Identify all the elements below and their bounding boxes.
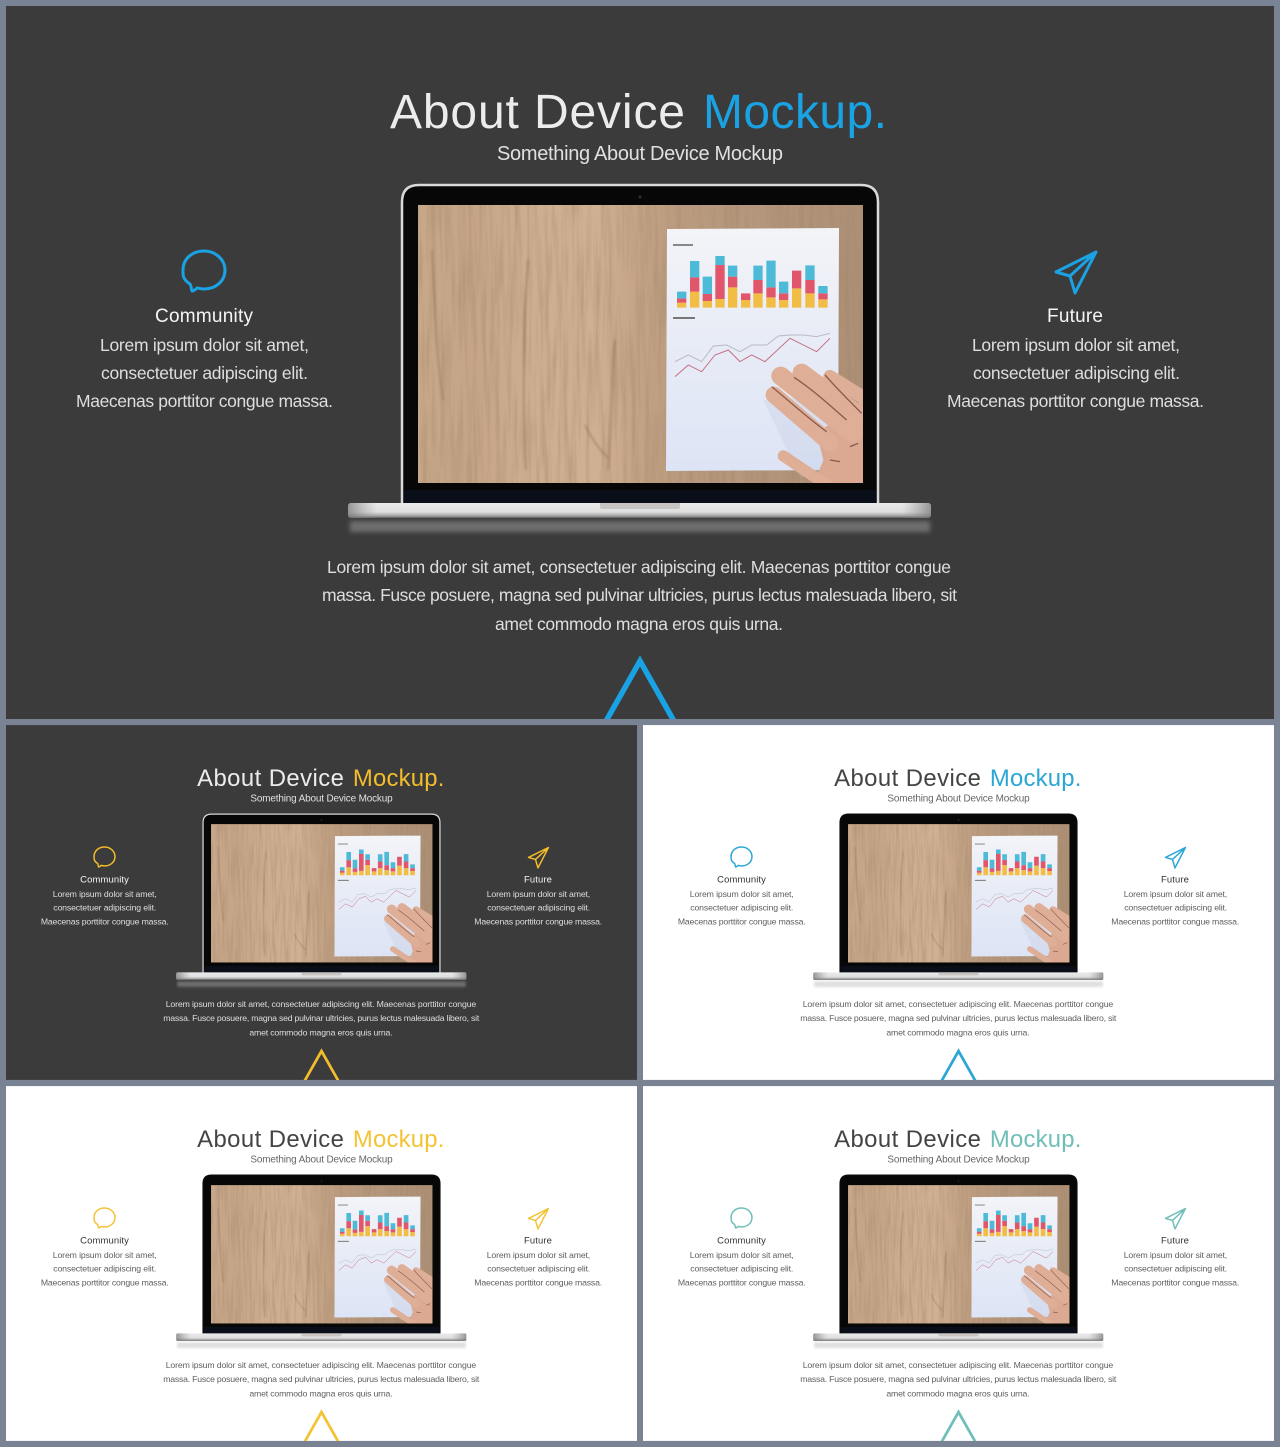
icon: speech bubble xyxy=(94,847,115,867)
laptop body xyxy=(840,814,1077,974)
wood desk photo xyxy=(848,1185,1069,1323)
text block: future: Lorem ipsum dolor sit amet, xyxy=(487,889,590,899)
icon: paper plane xyxy=(1166,848,1185,868)
triangle marker xyxy=(300,1412,343,1447)
description paragraph: amet commodo magna eros quis urna. xyxy=(886,1028,1030,1038)
bar chart xyxy=(340,1211,415,1236)
description paragraph: amet commodo magna eros quis urna. xyxy=(495,614,783,634)
text block: future xyxy=(474,874,602,927)
text block: community: Community xyxy=(155,306,254,327)
text block: future: Maecenas porttitor congue massa. xyxy=(1111,1278,1239,1288)
text block: community: Lorem ipsum dolor sit amet, xyxy=(53,1250,157,1260)
text block: future: Maecenas porttitor congue massa. xyxy=(474,917,602,927)
title xyxy=(834,1126,1081,1153)
wood desk photo xyxy=(848,824,1069,962)
text block: future: Maecenas porttitor congue massa. xyxy=(474,1278,602,1288)
report paper xyxy=(334,1197,421,1317)
hand xyxy=(383,1269,436,1324)
laptop mockup xyxy=(176,1175,466,1348)
text block: future: Future xyxy=(1047,306,1103,327)
icon: paper plane xyxy=(1166,1209,1185,1229)
text block: future: consectetuer adipiscing elit. xyxy=(487,1264,590,1274)
text block: community: consectetuer adipiscing elit. xyxy=(101,363,308,383)
subtitle: Something About Device Mockup xyxy=(250,794,393,805)
description paragraph xyxy=(800,1360,1117,1399)
text block: future: Future xyxy=(524,1235,552,1246)
line chart xyxy=(339,1249,416,1271)
laptop base xyxy=(176,972,466,980)
subtitle: Something About Device Mockup xyxy=(497,143,783,165)
description paragraph: Lorem ipsum dolor sit amet, consectetuer adipiscing elit. Maecenas porttitor congue xyxy=(166,999,476,1009)
line chart xyxy=(339,888,416,910)
laptop mockup xyxy=(348,185,931,532)
laptop mockup xyxy=(813,1175,1103,1348)
description paragraph: massa. Fusce posuere, magna sed pulvinar ultricies, purus lectus malesuada libero, sit xyxy=(800,1013,1117,1023)
hand xyxy=(1020,1269,1073,1324)
bar chart xyxy=(677,256,828,308)
description paragraph xyxy=(163,1360,480,1399)
title: Mockup. xyxy=(990,1126,1081,1153)
text block: community: Maecenas porttitor congue massa. xyxy=(678,917,806,927)
laptop base xyxy=(813,972,1103,980)
text block: future: Maecenas porttitor congue massa. xyxy=(1111,917,1239,927)
description paragraph: Lorem ipsum dolor sit amet, consectetuer adipiscing elit. Maecenas porttitor congue xyxy=(327,557,951,577)
icon: paper plane xyxy=(529,848,548,868)
laptop reflection xyxy=(350,521,930,532)
report paper xyxy=(971,1197,1058,1317)
laptop reflection xyxy=(177,981,466,987)
text block: community: Lorem ipsum dolor sit amet, xyxy=(100,335,309,355)
panel: small white slide, teal accent xyxy=(643,1086,1274,1441)
laptop reflection xyxy=(814,1342,1103,1348)
description paragraph: amet commodo magna eros quis urna. xyxy=(249,1389,393,1399)
panel: large dark slide, blue accent xyxy=(6,6,1274,719)
title xyxy=(390,86,887,139)
text block: community: Maecenas porttitor congue massa. xyxy=(76,391,333,411)
text block: community: consectetuer adipiscing elit. xyxy=(690,903,793,913)
text block: community: consectetuer adipiscing elit. xyxy=(690,1264,793,1274)
description paragraph: Lorem ipsum dolor sit amet, consectetuer adipiscing elit. Maecenas porttitor congue xyxy=(803,1360,1113,1370)
report paper xyxy=(971,836,1058,956)
title xyxy=(834,765,1081,792)
icon: speech bubble xyxy=(183,251,225,291)
laptop base xyxy=(348,503,931,518)
line chart xyxy=(976,888,1053,910)
description paragraph: massa. Fusce posuere, magna sed pulvinar ultricies, purus lectus malesuada libero, sit xyxy=(322,585,957,605)
description paragraph xyxy=(322,557,957,634)
text block: community: Maecenas porttitor congue massa. xyxy=(41,917,169,927)
title: About Device xyxy=(834,1126,981,1153)
text block: community: consectetuer adipiscing elit. xyxy=(53,903,156,913)
text block: future: Lorem ipsum dolor sit amet, xyxy=(487,1250,590,1260)
text block: community: Community xyxy=(717,874,766,885)
hand xyxy=(383,908,436,963)
laptop body xyxy=(203,1175,440,1335)
text block: future: Lorem ipsum dolor sit amet, xyxy=(972,335,1180,355)
text block: future: consectetuer adipiscing elit. xyxy=(1124,1264,1227,1274)
icon: paper plane xyxy=(1056,252,1096,293)
description paragraph: Lorem ipsum dolor sit amet, consectetuer adipiscing elit. Maecenas porttitor congue xyxy=(803,999,1113,1009)
text block: future xyxy=(947,306,1204,411)
panel: small white slide, yellow accent xyxy=(6,1086,637,1441)
icon: speech bubble xyxy=(731,847,752,867)
laptop body xyxy=(203,814,440,974)
text block: community: Maecenas porttitor congue massa. xyxy=(41,1278,169,1288)
title xyxy=(197,1126,444,1153)
title: Mockup. xyxy=(353,765,444,792)
text block: future: consectetuer adipiscing elit. xyxy=(973,363,1180,383)
icon: speech bubble xyxy=(94,1208,115,1228)
triangle marker xyxy=(937,1051,980,1089)
text block: future: consectetuer adipiscing elit. xyxy=(1124,903,1227,913)
laptop body xyxy=(402,185,878,506)
laptop base xyxy=(813,1333,1103,1341)
report paper xyxy=(666,228,839,471)
text block: community xyxy=(41,874,169,927)
line chart xyxy=(675,333,830,377)
subtitle: Something About Device Mockup xyxy=(887,1155,1030,1166)
report paper xyxy=(334,836,421,956)
text block: community xyxy=(41,1235,169,1288)
title: About Device xyxy=(834,765,981,792)
panel: small white slide, blue accent xyxy=(643,725,1274,1080)
laptop reflection xyxy=(177,1342,466,1348)
wood desk photo xyxy=(211,1185,432,1323)
title xyxy=(197,765,444,792)
text block: community: Lorem ipsum dolor sit amet, xyxy=(53,889,157,899)
description paragraph: amet commodo magna eros quis urna. xyxy=(249,1028,393,1038)
icon: paper plane xyxy=(529,1209,548,1229)
description paragraph: massa. Fusce posuere, magna sed pulvinar ultricies, purus lectus malesuada libero, sit xyxy=(163,1374,480,1384)
description paragraph xyxy=(163,999,480,1038)
text block: future: Future xyxy=(1161,874,1189,885)
text block: future xyxy=(1111,874,1239,927)
laptop reflection xyxy=(814,981,1103,987)
bar chart xyxy=(340,850,415,875)
panel: small dark slide, yellow accent xyxy=(6,725,637,1080)
line chart xyxy=(976,1249,1053,1271)
text block: community: Lorem ipsum dolor sit amet, xyxy=(690,889,794,899)
triangle marker xyxy=(597,661,683,737)
laptop mockup xyxy=(176,814,466,987)
wood desk photo xyxy=(418,205,863,483)
text block: community: Community xyxy=(80,874,129,885)
laptop base xyxy=(176,1333,466,1341)
laptop mockup xyxy=(813,814,1103,987)
wood desk photo xyxy=(211,824,432,962)
text block: future xyxy=(474,1235,602,1288)
title: Mockup. xyxy=(990,765,1081,792)
description paragraph: massa. Fusce posuere, magna sed pulvinar ultricies, purus lectus malesuada libero, sit xyxy=(163,1013,480,1023)
text block: future: consectetuer adipiscing elit. xyxy=(487,903,590,913)
laptop body xyxy=(840,1175,1077,1335)
triangle marker xyxy=(300,1051,343,1089)
text block: future: Lorem ipsum dolor sit amet, xyxy=(1124,1250,1227,1260)
title: Mockup. xyxy=(353,1126,444,1153)
description paragraph xyxy=(800,999,1117,1038)
title: About Device xyxy=(197,765,344,792)
text block: future xyxy=(1111,1235,1239,1288)
text block: community: consectetuer adipiscing elit. xyxy=(53,1264,156,1274)
hand xyxy=(1020,908,1073,963)
text block: community xyxy=(678,1235,806,1288)
text block: future: Future xyxy=(1161,1235,1189,1246)
subtitle: Something About Device Mockup xyxy=(250,1155,393,1166)
description paragraph: amet commodo magna eros quis urna. xyxy=(886,1389,1030,1399)
text block: community: Community xyxy=(717,1235,766,1246)
text block: future: Future xyxy=(524,874,552,885)
icon: speech bubble xyxy=(731,1208,752,1228)
text block: community xyxy=(76,306,333,411)
text block: future: Lorem ipsum dolor sit amet, xyxy=(1124,889,1227,899)
text block: future: Maecenas porttitor congue massa. xyxy=(947,391,1204,411)
description paragraph: massa. Fusce posuere, magna sed pulvinar ultricies, purus lectus malesuada libero, sit xyxy=(800,1374,1117,1384)
hand xyxy=(763,373,870,485)
triangle marker xyxy=(937,1412,980,1447)
bar chart xyxy=(977,1211,1052,1236)
title: About Device xyxy=(197,1126,344,1153)
text block: community xyxy=(678,874,806,927)
description paragraph: Lorem ipsum dolor sit amet, consectetuer adipiscing elit. Maecenas porttitor congue xyxy=(166,1360,476,1370)
title: Mockup. xyxy=(703,86,887,139)
text block: community: Lorem ipsum dolor sit amet, xyxy=(690,1250,794,1260)
text block: community: Community xyxy=(80,1235,129,1246)
subtitle: Something About Device Mockup xyxy=(887,794,1030,805)
bar chart xyxy=(977,850,1052,875)
title: About Device xyxy=(390,86,685,139)
text block: community: Maecenas porttitor congue massa. xyxy=(678,1278,806,1288)
